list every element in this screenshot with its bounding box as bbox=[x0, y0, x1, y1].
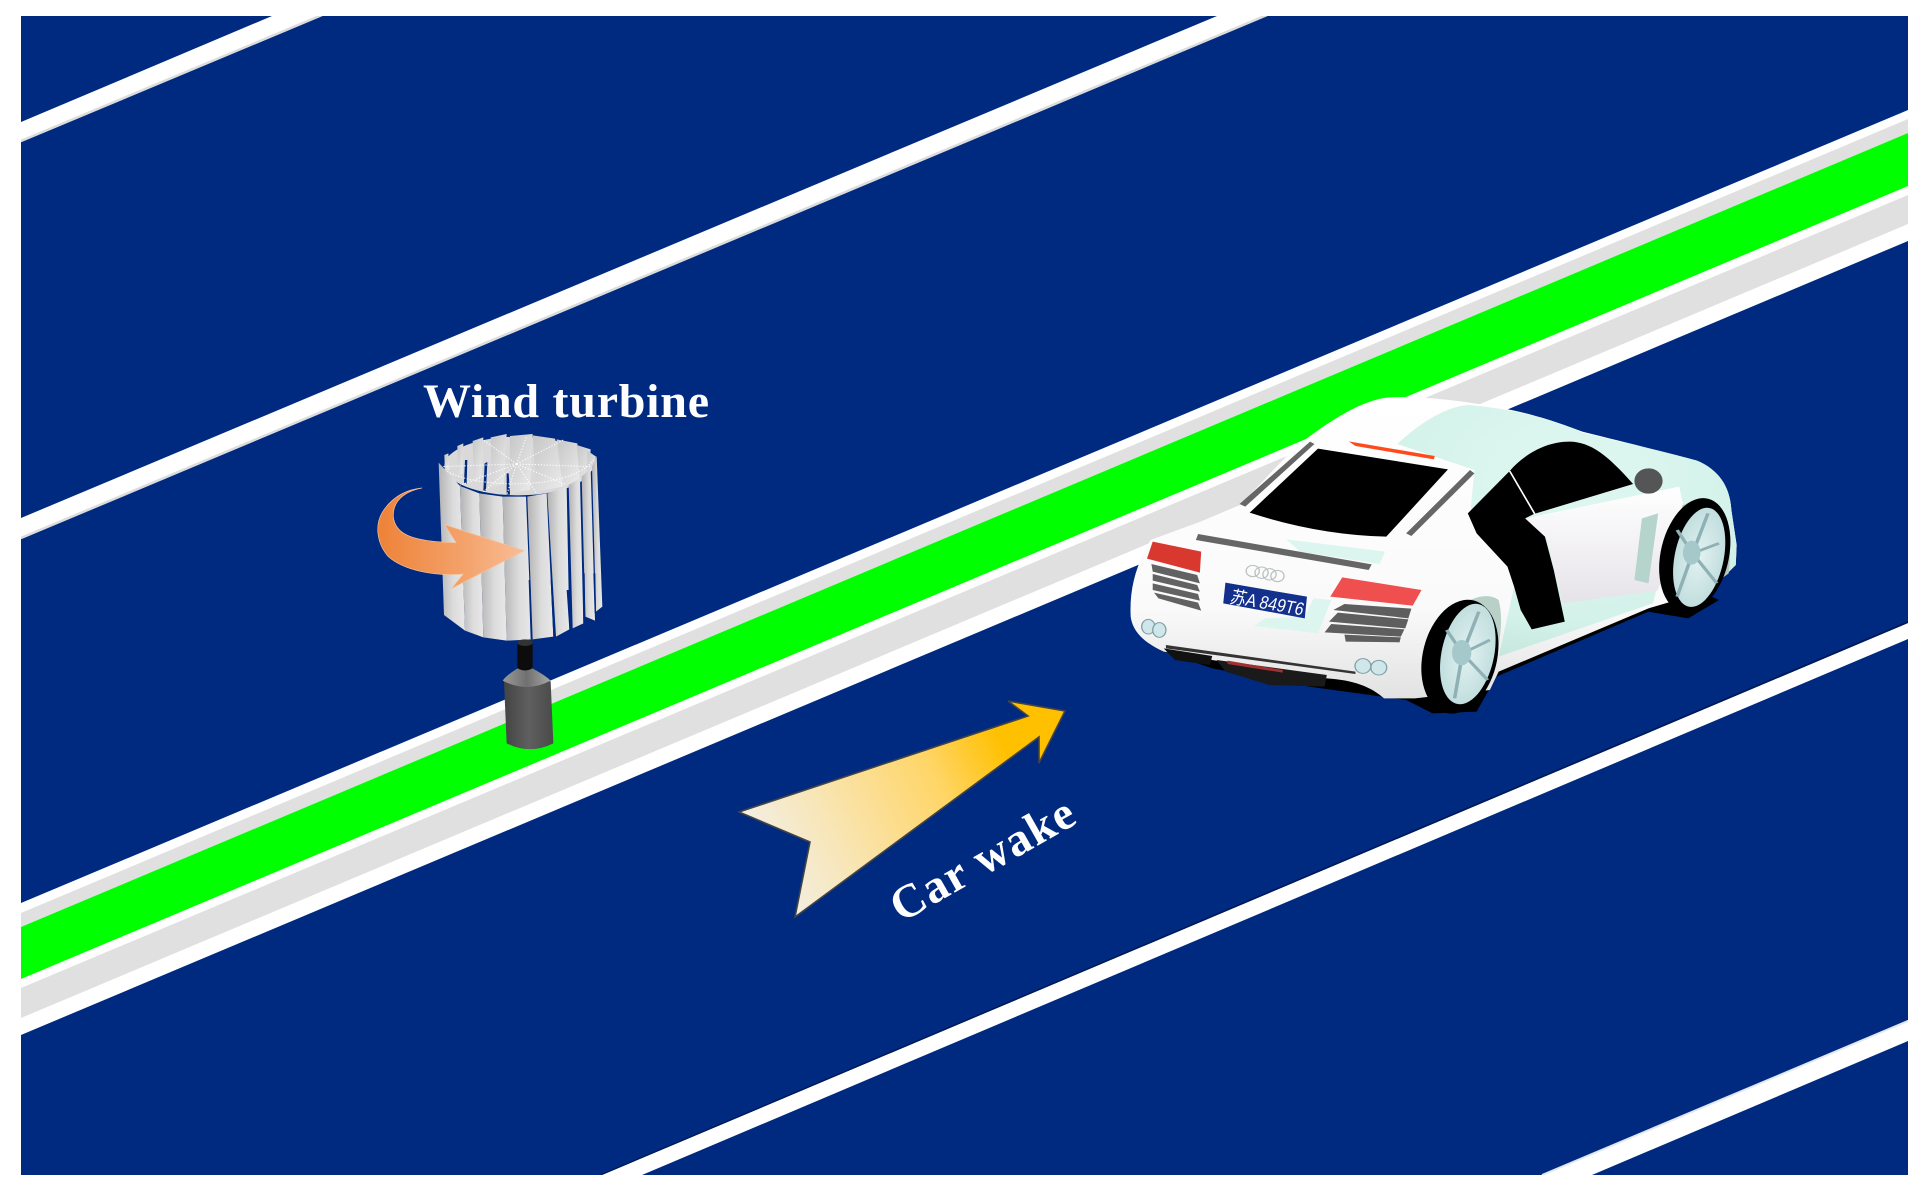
diffuser bbox=[1164, 645, 1355, 687]
car door bbox=[1525, 488, 1683, 603]
rear louvers bbox=[1196, 442, 1474, 570]
icon: rotation arrow bbox=[378, 488, 524, 589]
label: car wake: Car wake bbox=[881, 787, 1084, 933]
car body bbox=[1130, 397, 1737, 698]
turbine base bbox=[503, 668, 553, 749]
arrow: car wake bbox=[739, 701, 1065, 917]
right grille bbox=[1325, 604, 1411, 642]
label: wind turbine: Wind turbine bbox=[423, 375, 709, 428]
window divider bbox=[1510, 471, 1535, 514]
turbine front blades bbox=[439, 456, 602, 641]
car shadow bbox=[1159, 570, 1719, 713]
four rings badge bbox=[1246, 565, 1284, 582]
side window and door opening bbox=[1468, 442, 1633, 629]
turbine gaps bbox=[529, 573, 596, 639]
door mirror bbox=[1634, 468, 1663, 494]
wind turbine bbox=[378, 434, 602, 749]
turbine top disc bbox=[444, 437, 592, 495]
car roof and side panels bbox=[1397, 405, 1737, 657]
license plate text: 苏A 849T6 bbox=[1228, 587, 1307, 620]
car rear deck patches bbox=[1254, 539, 1385, 633]
rear window bbox=[1250, 449, 1448, 537]
far wheel bbox=[1650, 495, 1739, 615]
turbine top spokes bbox=[440, 436, 593, 495]
car side vent bbox=[1634, 513, 1658, 583]
license plate bbox=[1223, 583, 1307, 618]
turbine shaft bbox=[517, 639, 533, 671]
left grille bbox=[1151, 564, 1201, 611]
near wheel arch bbox=[1446, 596, 1501, 657]
exhausts bbox=[1142, 619, 1387, 675]
brake light bbox=[1349, 441, 1435, 459]
turbine back blades bbox=[444, 434, 596, 493]
tail lights bbox=[1147, 542, 1201, 573]
far wheel arch bbox=[1671, 501, 1730, 583]
turbine inner gaps bbox=[464, 460, 510, 495]
near wheel bbox=[1412, 596, 1508, 717]
car bbox=[1130, 397, 1739, 717]
